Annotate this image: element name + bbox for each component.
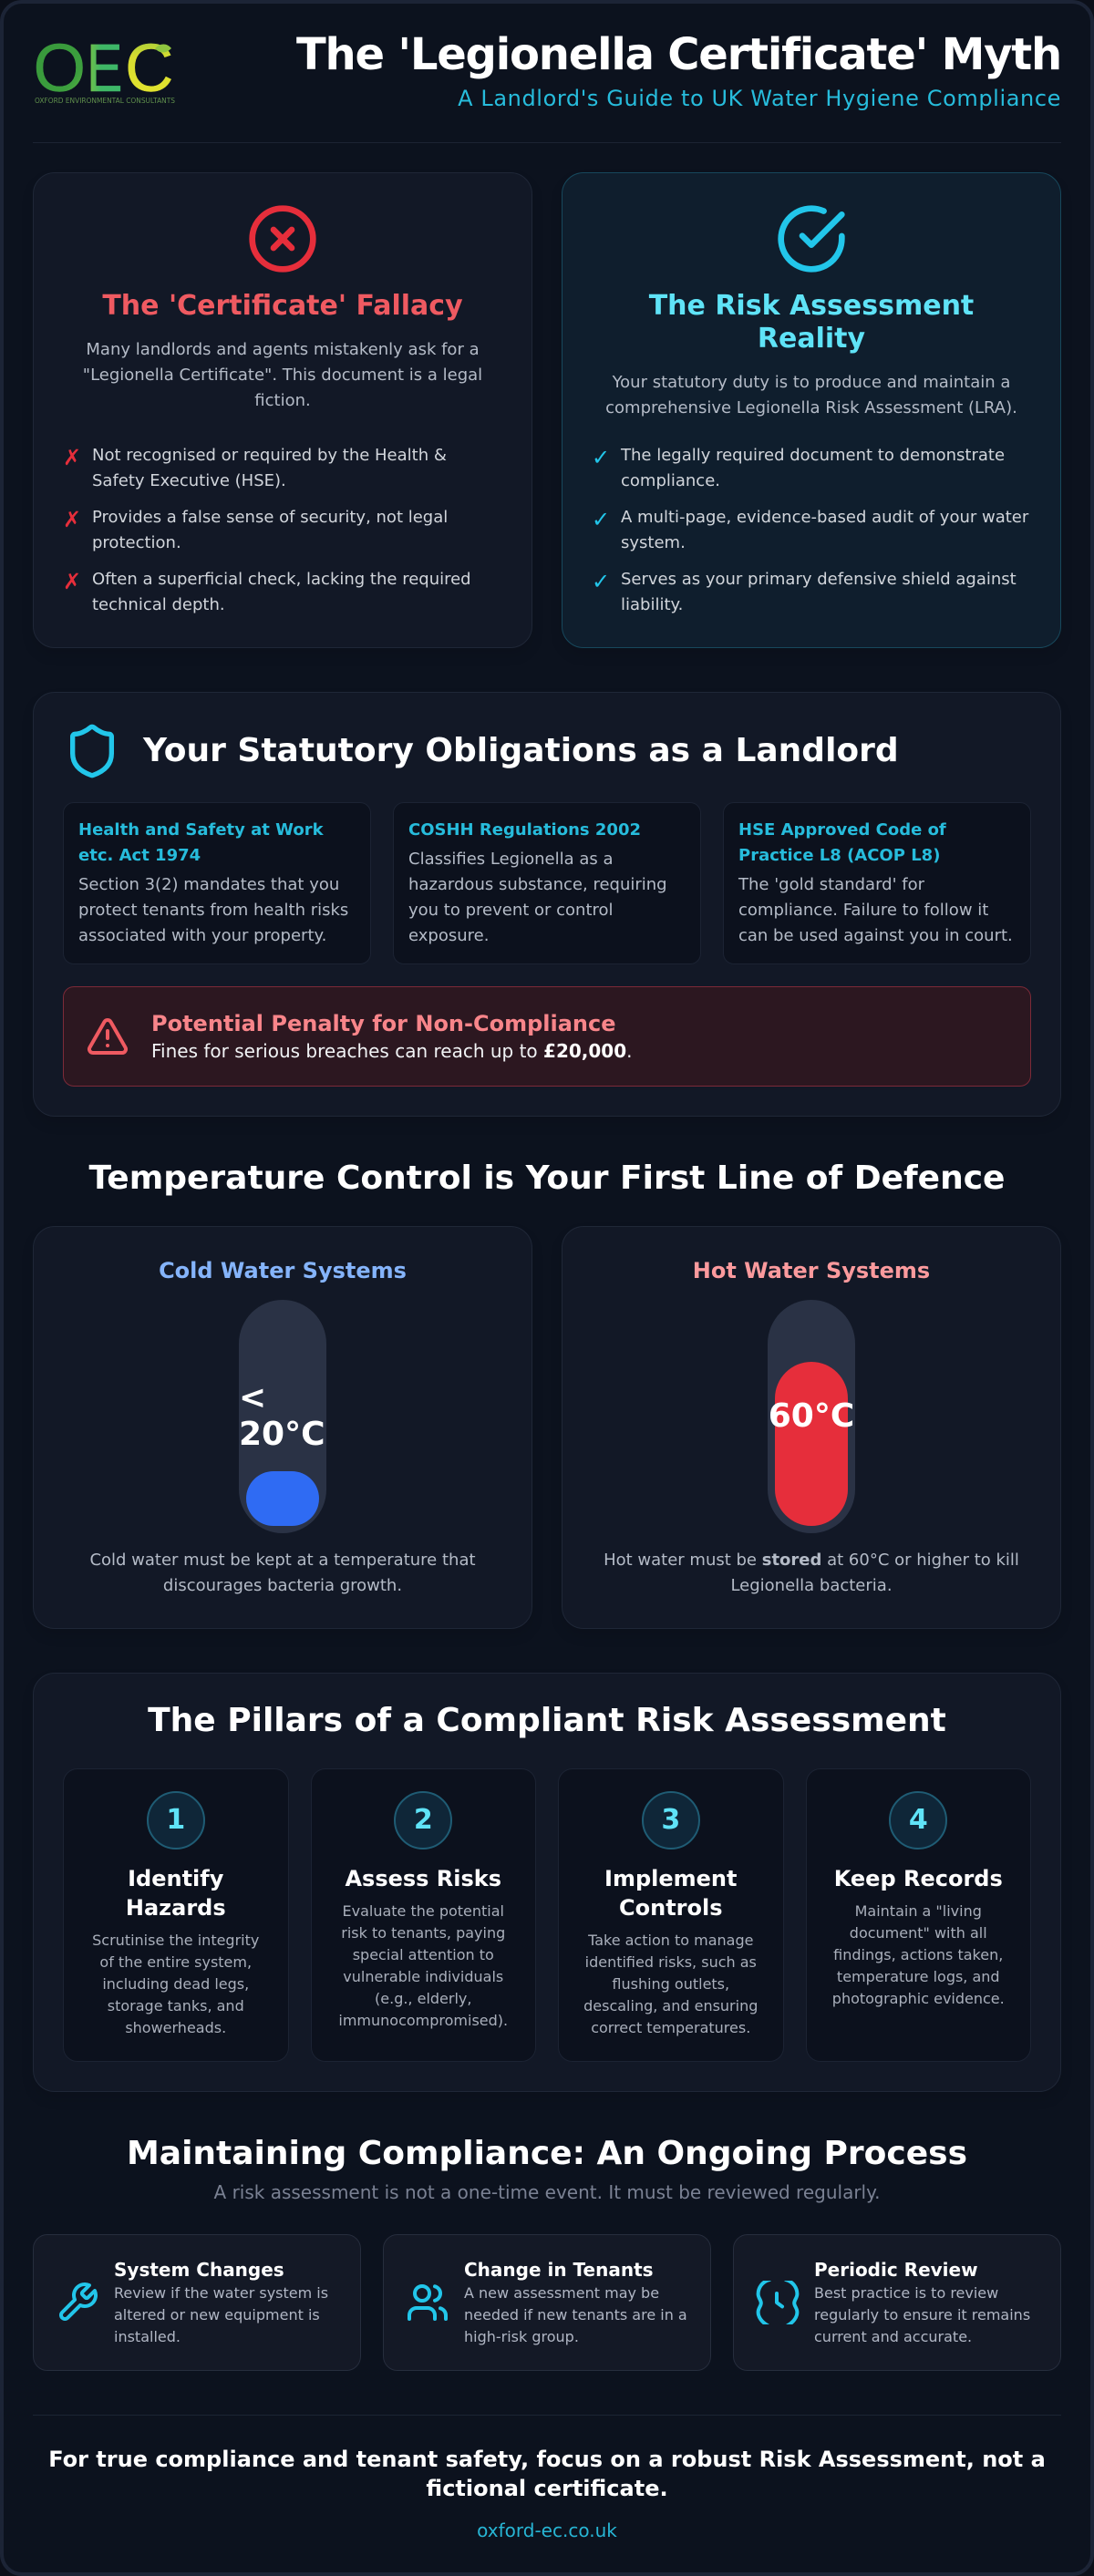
subtitle: A Landlord's Guide to UK Water Hygiene Compliance <box>458 86 1061 111</box>
pillar 3: Implement Controls <box>604 1866 737 1921</box>
review trigger cards <box>33 2234 1061 2371</box>
thermometer: cold: < 20°C <box>239 1379 325 1453</box>
pillar cards <box>63 1768 1031 2062</box>
penalty text: Fines for serious breaches can reach up to £20,000. <box>151 1040 632 1062</box>
penalty text <box>151 1011 632 1062</box>
pillar 2: Assess Risks <box>345 1866 501 1891</box>
thermometer: cold <box>239 1300 326 1533</box>
logo: Oxford Environmental Consultants: E <box>87 31 122 107</box>
pillar 2: 2 <box>414 1804 433 1836</box>
pillar 1: 1 <box>166 1804 185 1836</box>
subheading: maintaining compliance: A risk assessment is not a one-time event. It must be reviewed regularly. <box>214 2181 880 2203</box>
icon: shield <box>70 724 114 778</box>
list: reality points: ✓ <box>592 569 610 594</box>
card: HSWA 1974 <box>63 802 371 964</box>
text: system changes: Review if the water system is altered or new equipment is installed. <box>114 2284 328 2345</box>
list: reality points: A multi-page, evidence-based audit of your water system. <box>621 508 1028 552</box>
heading: obligations: Your Statutory Obligations as a Landlord <box>143 732 899 769</box>
list: fallacy points <box>63 445 471 614</box>
text: system changes: System Changes <box>114 2259 284 2281</box>
card: HSWA 1974: Section 3(2) mandates that you protect tenants from health risks associated with your property. <box>78 875 348 945</box>
list: reality points: ✓ <box>592 445 610 470</box>
pillar 4: 4 <box>909 1804 928 1836</box>
panel: cold water <box>33 1226 532 1629</box>
penalty text: Potential Penalty for Non-Compliance <box>151 1011 616 1036</box>
panel: pillars <box>33 1673 1061 2092</box>
text: change in tenants: Change in Tenants <box>464 2259 654 2281</box>
header <box>33 33 1061 143</box>
pillar 1: Scrutinise the integrity of the entire system, including dead legs, storage tanks, and showerheads. <box>92 1932 259 2036</box>
thermometer: hot: 60°C <box>769 1397 854 1435</box>
icon: wrench <box>59 2282 98 2321</box>
heading: temperature control: Temperature Control is Your First Line of Defence <box>89 1159 1005 1197</box>
temperature panels <box>33 1226 1061 1629</box>
description: certificate fallacy: Many landlords and agents mistakenly ask for a "Legionella Certificate". This document is a legal fiction. <box>83 340 482 410</box>
icon: users <box>408 2284 448 2321</box>
heading: cold water: Cold Water Systems <box>159 1258 407 1283</box>
list: fallacy points: Often a superficial check, lacking the required technical depth. <box>92 570 471 614</box>
logo: Oxford Environmental Consultants <box>33 30 175 107</box>
card: system changes <box>33 2234 361 2371</box>
panel: the certificate fallacy <box>33 172 532 648</box>
list: fallacy points: ✗ <box>63 445 81 470</box>
heading: pillars: The Pillars of a Compliant Risk Assessment <box>148 1702 946 1739</box>
pillar 3: 3 <box>661 1804 680 1836</box>
pillar 3: Take action to manage identified risks, such as flushing outlets, descaling, and ensuring correct temperatures. <box>583 1932 758 2036</box>
card: ACOP L8 <box>723 802 1031 964</box>
list: fallacy points: ✗ <box>63 507 81 532</box>
thermometer: hot <box>768 1300 855 1533</box>
text: change in tenants: A new assessment may be needed if new tenants are in a high-risk group. <box>464 2284 687 2345</box>
text: periodic review: Best practice is to review regularly to ensure it remains current and accurate. <box>814 2284 1030 2345</box>
heading: maintaining compliance: Maintaining Compliance: An Ongoing Process <box>127 2135 967 2172</box>
list: fallacy points: Provides a false sense of security, not legal protection. <box>92 508 448 552</box>
pillar 3 <box>558 1768 784 2062</box>
card: periodic review <box>733 2234 1061 2371</box>
icon: check circle <box>778 205 845 273</box>
card: HSWA 1974: Health and Safety at Work etc. Act 1974 <box>78 820 324 865</box>
logo: Oxford Environmental Consultants: OXFORD ENVIRONMENTAL CONSULTANTS <box>35 97 175 105</box>
title block <box>296 29 1061 111</box>
icon: x circle <box>249 205 316 273</box>
description: hot water: Hot water must be stored at 60°C or higher to kill Legionella bacteria. <box>604 1551 1019 1595</box>
footer <box>33 2415 1061 2543</box>
list: reality points <box>592 445 1028 614</box>
comparison panels <box>33 172 1061 648</box>
panel: the risk assessment reality <box>562 172 1061 648</box>
heading: risk assessment reality: The Risk Assessment Reality <box>649 290 974 355</box>
description: risk assessment reality: Your statutory duty is to produce and maintain a comprehensive Legionella Risk Assessment (LRA). <box>605 373 1017 417</box>
panel: hot water <box>562 1226 1061 1629</box>
card: ACOP L8: HSE Approved Code of Practice L8 (ACOP L8) <box>738 820 946 865</box>
icon: warning triangle <box>88 1018 128 1055</box>
title: The 'Legionella Certificate' Myth <box>296 29 1061 80</box>
pillar 2: Evaluate the potential risk to tenants, paying special attention to vulnerable individuals (e.g., elderly, immunocompromised). <box>338 1902 508 2029</box>
obligations heading row <box>70 724 899 778</box>
heading: hot water: Hot Water Systems <box>693 1258 930 1283</box>
description: cold water: Cold water must be kept at a temperature that discourages bacteria growth. <box>89 1551 476 1595</box>
callout: penalty <box>63 986 1031 1087</box>
panel: statutory obligations <box>33 692 1061 1117</box>
pillar 4 <box>806 1768 1031 2062</box>
card: COSHH: COSHH Regulations 2002 <box>408 820 641 840</box>
pillar 1 <box>63 1768 288 2062</box>
logo: Oxford Environmental Consultants: C <box>125 30 173 106</box>
list: reality points: The legally required document to demonstrate compliance. <box>621 446 1005 490</box>
list: reality points: Serves as your primary defensive shield against liability. <box>621 570 1017 614</box>
card: COSHH: Classifies Legionella as a hazardous substance, requiring you to prevent or control exposure. <box>408 850 667 945</box>
closing statement: For true compliance and tenant safety, focus on a robust Risk Assessment, not a fictional certificate. <box>48 2447 1046 2501</box>
list: reality points: ✓ <box>592 507 610 532</box>
icon: clipped clock <box>757 2281 799 2324</box>
pillar 2 <box>310 1768 536 2062</box>
card: ACOP L8: The 'gold standard' for compliance. Failure to follow it can be used against you in court. <box>738 875 1013 945</box>
list: fallacy points: Not recognised or required by the Health & Safety Executive (HSE). <box>92 446 447 490</box>
text: periodic review: Periodic Review <box>814 2259 978 2281</box>
legislation cards <box>63 802 1031 964</box>
pillar 1: Identify Hazards <box>126 1866 226 1921</box>
list: fallacy points: ✗ <box>63 569 81 594</box>
logo: Oxford Environmental Consultants: O <box>33 30 86 106</box>
card: change in tenants <box>383 2234 711 2371</box>
heading: certificate fallacy: The 'Certificate' Fallacy <box>102 290 463 322</box>
website: oxford-ec.co.uk <box>477 2519 617 2541</box>
card: COSHH <box>393 802 701 964</box>
pillar 4: Keep Records <box>834 1866 1003 1891</box>
pillar 4: Maintain a "living document" with all findings, actions taken, temperature logs, and photographic evidence. <box>832 1902 1005 2007</box>
